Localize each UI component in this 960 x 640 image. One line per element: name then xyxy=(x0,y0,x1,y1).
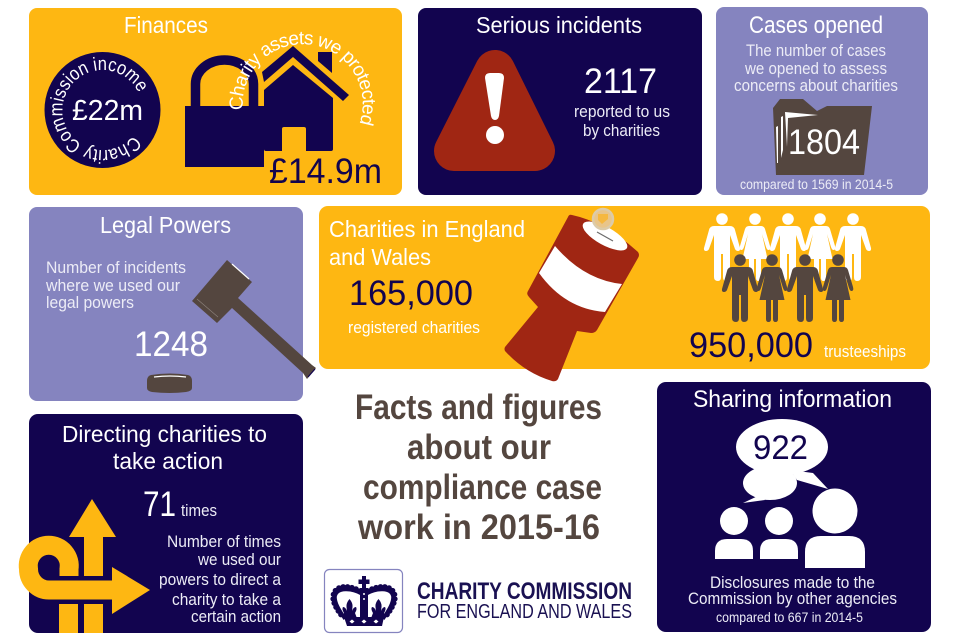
text: directing description: we used our xyxy=(197,550,281,569)
panel: finances xyxy=(29,8,402,195)
text: cases description: The number of cases xyxy=(746,41,886,60)
heading: charities: Charities in England xyxy=(329,216,525,242)
panel: directing charities xyxy=(28,414,303,633)
panel: cases opened xyxy=(716,7,928,195)
text: cases comparison: compared to 1569 in 2014-5 xyxy=(740,177,893,192)
text: directing description: certain action xyxy=(191,607,281,626)
panel: legal powers xyxy=(29,207,316,401)
title xyxy=(355,388,602,547)
heading: legal powers: Legal Powers xyxy=(100,212,231,238)
icon: house xyxy=(262,46,349,151)
icon: crown xyxy=(333,576,395,626)
text: disclosures xyxy=(688,573,897,608)
icon: income circle: £22m xyxy=(72,95,143,127)
title: work in 2015-16 xyxy=(357,508,600,547)
icon: speech bubbles xyxy=(736,419,828,503)
heading: directing charities: Directing charities to xyxy=(62,421,267,447)
text: reported to us: by charities xyxy=(583,121,660,140)
text: legal description: legal powers xyxy=(46,293,134,312)
heading: directing charities: take action xyxy=(113,448,223,474)
icon: padlock xyxy=(185,60,264,167)
text: directing description: powers to direct a xyxy=(159,570,281,589)
curved label: charity assets: Charity assets we protected xyxy=(229,32,376,126)
text: registered charities: registered charities xyxy=(348,318,480,337)
icon: income circle: Charity Commission income xyxy=(50,56,146,164)
icon: gavel block xyxy=(147,374,192,393)
icon: collection tin xyxy=(504,209,639,381)
logo text xyxy=(417,578,632,623)
text: disclosures: Commission by other agencies xyxy=(688,589,897,608)
figure: 1248: 1248 xyxy=(134,325,208,364)
heading: finances: Finances xyxy=(124,12,208,38)
heading: cases opened: Cases opened xyxy=(749,12,883,39)
text: directing description xyxy=(159,532,281,626)
heading: directing charities xyxy=(62,421,267,474)
icon: three people xyxy=(715,488,865,568)
text: disclosures: Disclosures made to the xyxy=(710,573,875,592)
logo box xyxy=(324,570,402,632)
logo: Charity Commission xyxy=(324,570,632,632)
icon: gavel xyxy=(192,260,316,379)
panel: charities in England and Wales xyxy=(319,206,930,381)
text: disclosures comparison: compared to 667 in 2014-5 xyxy=(716,610,863,625)
text: reported to us: reported to us xyxy=(574,102,670,121)
title: compliance case xyxy=(363,468,602,507)
text: legal description xyxy=(45,258,186,312)
heading: charities xyxy=(329,216,525,270)
figure: 71 times xyxy=(143,485,217,524)
icon: folder xyxy=(773,99,872,175)
text: reported to us xyxy=(574,102,670,140)
text: cases description: we opened to assess xyxy=(744,59,887,78)
figure: 922: 922 xyxy=(753,429,808,467)
figure: 1804: 1804 xyxy=(788,123,860,162)
title: about our xyxy=(407,428,551,467)
figure: assets value: £14.9m xyxy=(269,152,382,191)
text: trusteeships: trusteeships xyxy=(824,342,906,361)
text: directing description: Number of times xyxy=(167,532,281,551)
icon: white trustees row xyxy=(704,213,871,281)
figure: 71 times: 71 xyxy=(143,485,176,524)
icon: dark trustees row xyxy=(722,254,853,322)
icon: direction arrows xyxy=(28,499,150,633)
heading: charities: and Wales xyxy=(329,244,431,270)
heading: sharing information: Sharing information xyxy=(693,386,892,413)
heading: serious incidents: Serious incidents xyxy=(476,12,642,38)
text: legal description: Number of incidents xyxy=(46,258,186,277)
text: directing description: charity to take a xyxy=(172,590,281,609)
figure: 71 times: times xyxy=(181,501,217,520)
logo text: CHARITY COMMISSION xyxy=(417,578,632,605)
text: legal description: where we used our xyxy=(45,276,180,295)
logo text: FOR ENGLAND AND WALES xyxy=(417,601,632,623)
text: cases description: concerns about charities xyxy=(734,76,898,95)
panel: sharing information xyxy=(657,382,931,632)
figure: 950,000: 950,000 xyxy=(689,326,813,365)
figure: 165,000: 165,000 xyxy=(349,274,473,313)
figure: 2117: 2117 xyxy=(584,62,657,101)
text: cases description xyxy=(734,41,898,95)
icon: warning triangle xyxy=(454,70,535,151)
panel: serious incidents xyxy=(418,8,702,195)
title: Facts and figures xyxy=(355,388,602,427)
